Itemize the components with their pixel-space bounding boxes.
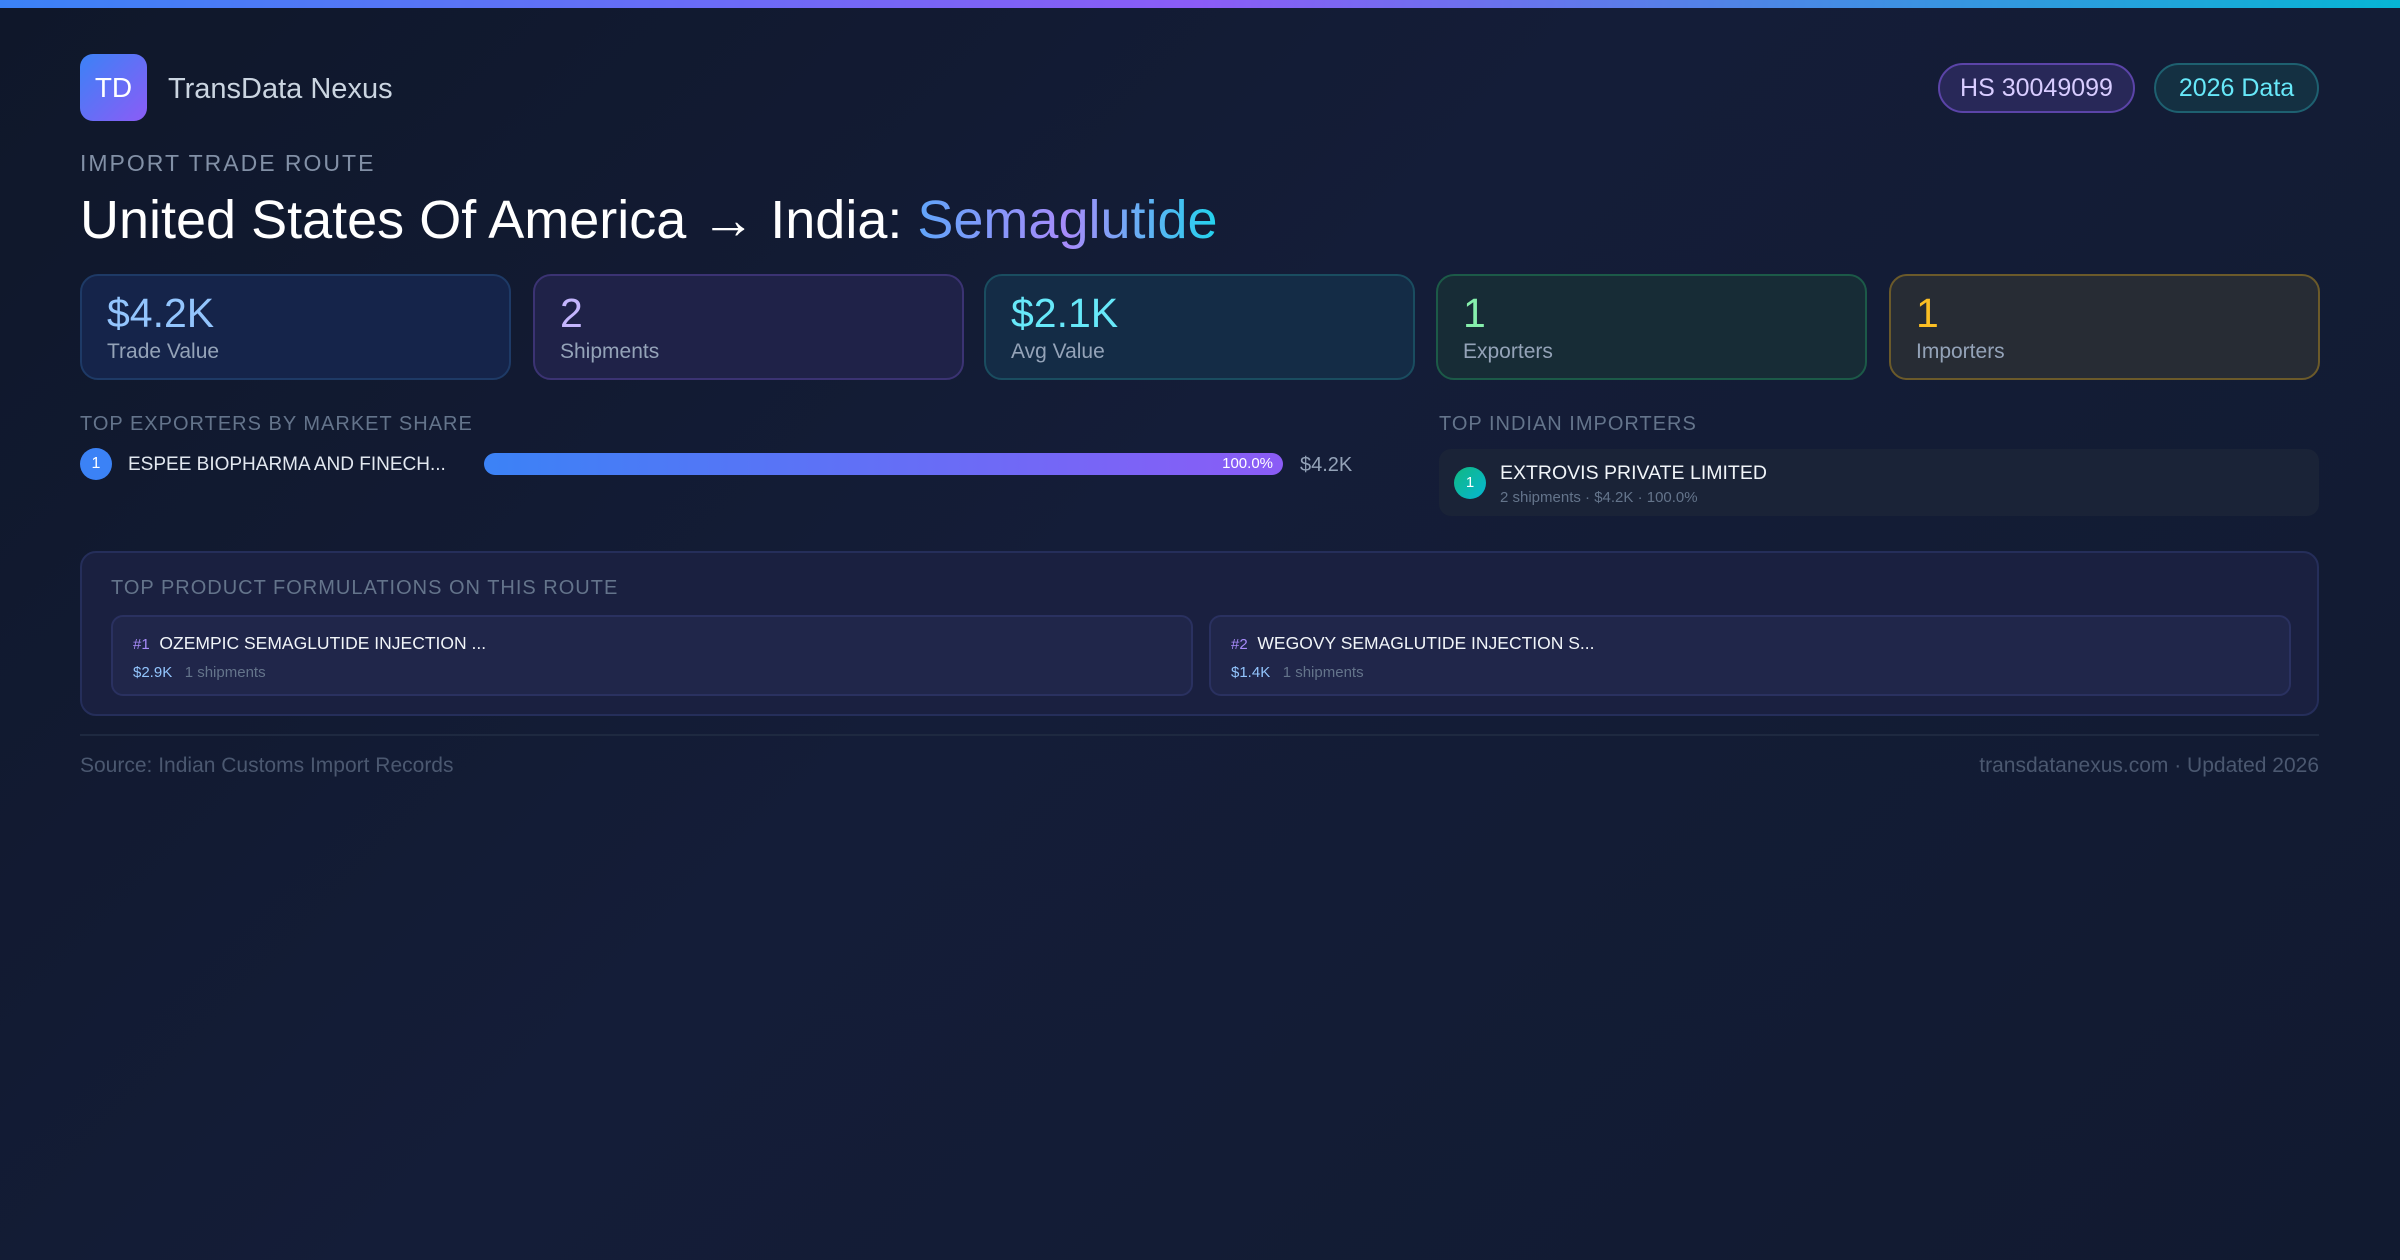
card: exporters — [1436, 274, 1867, 380]
product 2: #2 WEGOVY SEMAGLUTIDE INJECTION S... — [1231, 633, 1595, 653]
rank badge: 1 — [92, 455, 100, 472]
card: trade value: Trade Value — [107, 340, 219, 363]
product 1 — [111, 615, 1193, 696]
card: shipments: Shipments — [560, 340, 659, 363]
pill: year — [2154, 63, 2319, 113]
value: $4.2K — [1300, 454, 1352, 476]
product 1: #1 OZEMPIC SEMAGLUTIDE INJECTION ... — [133, 633, 486, 653]
card: importers: Importers — [1916, 340, 2005, 363]
importers heading: TOP INDIAN IMPORTERS — [1439, 413, 1697, 435]
pill: HS code — [1938, 63, 2135, 113]
card: exporters: 1 — [1463, 290, 1486, 336]
card: avg value: Avg Value — [1011, 340, 1105, 363]
bar: 100.0% — [1222, 455, 1273, 472]
rank badge — [1454, 467, 1486, 499]
card: trade value: $4.2K — [107, 290, 214, 336]
product 2: $1.4K 1 shipments — [1231, 664, 1364, 681]
logo: TD — [95, 72, 132, 103]
exporters heading: TOP EXPORTERS BY MARKET SHARE — [80, 413, 473, 435]
card: shipments — [533, 274, 964, 380]
card: avg value — [984, 274, 1415, 380]
logo — [80, 54, 147, 121]
card: exporters: Exporters — [1463, 340, 1553, 363]
product 2 — [1209, 615, 2291, 696]
footer site: transdatanexus.com · Updated 2026 — [1979, 754, 2319, 777]
rank badge: 1 — [1466, 474, 1474, 491]
exporter row — [80, 448, 1352, 480]
brand name: TransData Nexus — [168, 73, 393, 105]
card: avg value: $2.1K — [1011, 290, 1118, 336]
exporter name: ESPEE BIOPHARMA AND FINECH... — [128, 454, 446, 475]
card: importers — [1889, 274, 2320, 380]
panel: products — [80, 551, 2319, 716]
title: United States Of America → India: Semaglutide — [80, 190, 1218, 250]
subtitle: IMPORT TRADE ROUTE — [80, 150, 375, 176]
footer source: Source: Indian Customs Import Records — [80, 754, 454, 777]
panel heading: TOP PRODUCT FORMULATIONS ON THIS ROUTE — [111, 577, 618, 599]
rank badge — [80, 448, 112, 480]
card: trade value — [80, 274, 511, 380]
bar — [484, 453, 1283, 475]
pill: HS code: HS 30049099 — [1960, 74, 2113, 102]
importer name: EXTROVIS PRIVATE LIMITED — [1500, 462, 1767, 484]
importer row — [1439, 449, 2319, 516]
importer detail: 2 shipments · $4.2K · 100.0% — [1500, 489, 1698, 506]
pill: year: 2026 Data — [2179, 74, 2294, 102]
top gradient bar — [0, 0, 2400, 8]
card: shipments: 2 — [560, 290, 583, 336]
card: importers: 1 — [1916, 290, 1939, 336]
product 1: $2.9K 1 shipments — [133, 664, 266, 681]
